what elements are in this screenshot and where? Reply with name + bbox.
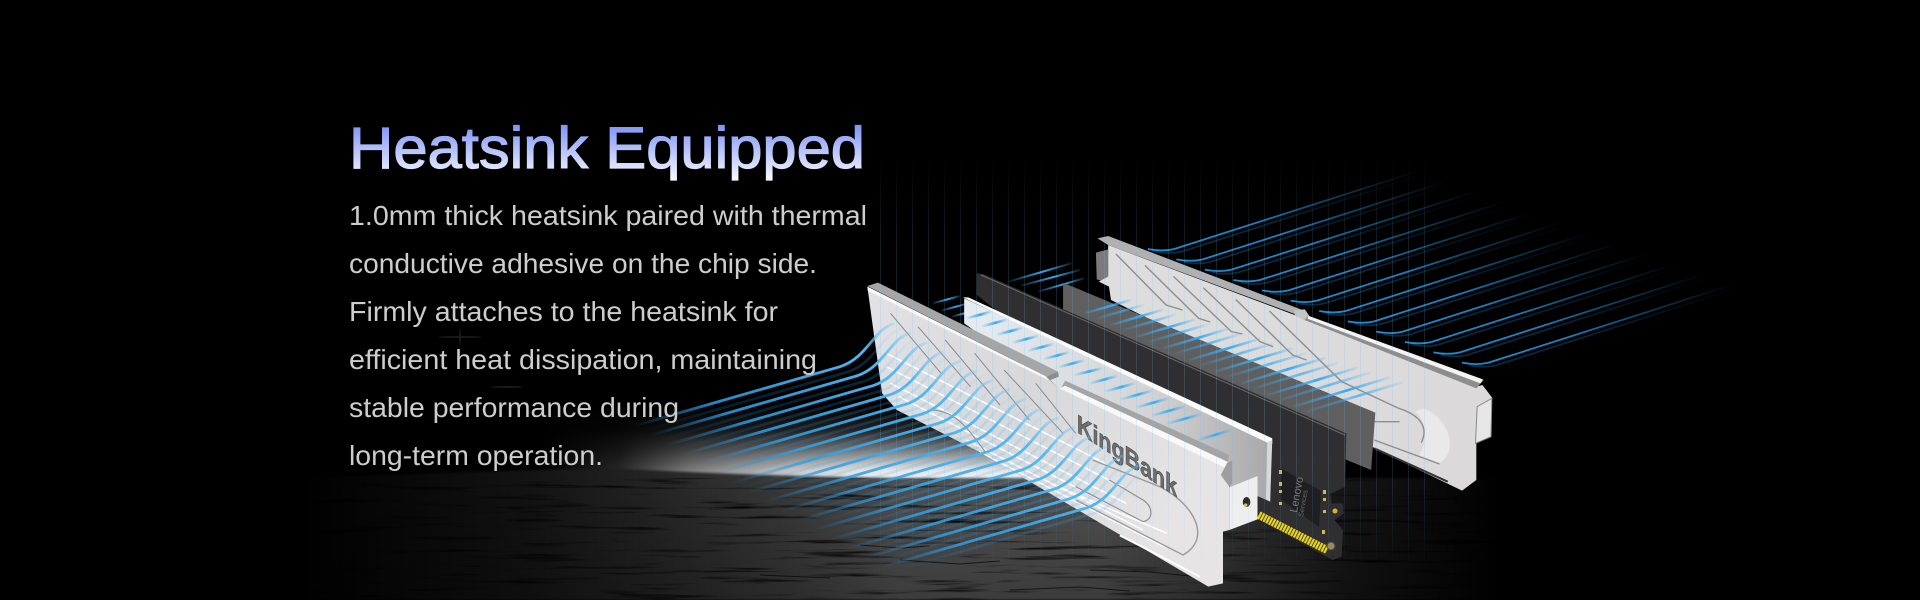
moon-like ground surface bbox=[300, 468, 1500, 600]
lit horizon glow bbox=[558, 411, 1026, 480]
infographic canvas bbox=[350, 124, 1724, 600]
lighter channel pad bbox=[1415, 408, 1450, 463]
top rim bbox=[1098, 236, 1305, 317]
heat channel contour bbox=[1050, 460, 1200, 577]
top rim left section bbox=[867, 283, 1058, 377]
description text block: efficient heat dissipation, maintaining bbox=[349, 344, 817, 375]
end bevel bbox=[1221, 461, 1232, 487]
fin slots bbox=[891, 313, 1076, 452]
white diagonal stripes bbox=[886, 353, 1164, 547]
airflow lines behind rear heatsink bbox=[1148, 171, 1741, 367]
front heatsink plate bbox=[867, 283, 1258, 587]
plate face bbox=[867, 287, 1229, 587]
airflow dashes upper left behind modules bbox=[933, 263, 1084, 317]
slots and heat pipe channels bbox=[1116, 254, 1448, 482]
left mounting tab bbox=[1096, 249, 1108, 283]
vertical airflow grid lines bbox=[880, 179, 1425, 546]
grey thermal pad bbox=[1063, 283, 1375, 470]
airflow dashes between front plate and PCB bbox=[966, 312, 1231, 440]
description text block: 1.0mm thick heatsink paired with thermal bbox=[349, 200, 867, 231]
mounting tab bbox=[1229, 476, 1258, 530]
right tab bbox=[1476, 398, 1492, 443]
description text block bbox=[349, 200, 867, 471]
top rim right section bbox=[1061, 381, 1229, 463]
description text block: conductive adhesive on the chip side. bbox=[349, 248, 817, 279]
KingBank logo: KingBank bbox=[1077, 409, 1177, 503]
memory chip with label bbox=[1279, 468, 1338, 550]
inner lip of front heatsink bbox=[963, 297, 1272, 502]
plate face bbox=[1099, 245, 1493, 491]
title: Heatsink Equipped bbox=[349, 116, 865, 181]
gold edge connector bbox=[1259, 515, 1327, 550]
memory chip with label: Services bbox=[1298, 489, 1310, 517]
memory chip with label: Lenovo bbox=[1288, 476, 1306, 514]
rear heatsink plate bbox=[1096, 236, 1493, 491]
sparkles behind text bbox=[438, 329, 523, 388]
description text block: stable performance during bbox=[349, 392, 679, 423]
description text block: long-term operation. bbox=[349, 440, 603, 471]
front airflow curves bbox=[634, 323, 1149, 573]
description text block: Firmly attaches to the heatsink for bbox=[349, 296, 778, 327]
airflow dashes across pad and rear plate bbox=[1085, 300, 1403, 412]
memory PCB bbox=[977, 273, 1346, 560]
